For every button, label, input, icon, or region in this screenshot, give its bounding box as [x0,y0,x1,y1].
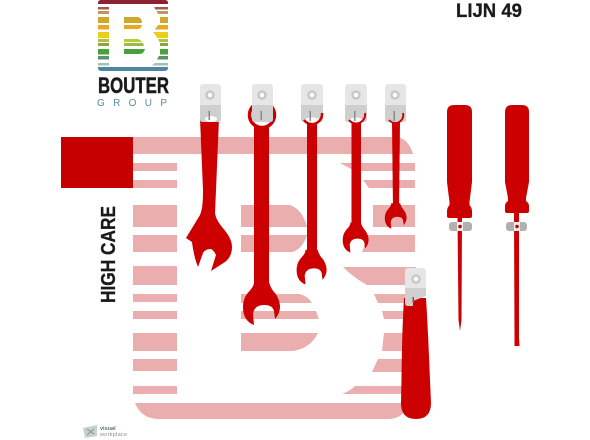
screwdriver 1 [447,105,472,331]
wrench 4 [343,123,369,253]
red label block [61,137,133,188]
logo mark: striped B [98,0,168,71]
logo wordmark: BOUTER [98,73,169,98]
footer logo: visual workplace [83,425,127,438]
logo: Bouter Group [97,0,169,109]
line label: LIJN 49 [456,1,522,22]
screwdriver 2 [505,105,529,346]
logo sub-wordmark: GROUP [97,98,167,109]
panel: striped B background [133,137,416,419]
clip [449,222,472,231]
bracket 6 [405,268,426,306]
clip [506,222,527,231]
wrench 3 [297,124,327,285]
bracket 2 [252,84,273,122]
zone label: HIGH CARE [98,206,120,303]
footer logo: visual workplace: workplace [99,432,127,438]
large screwdriver handle [401,298,431,419]
bracket 3 [301,84,323,124]
wrench 5 [385,122,407,229]
footer icon [83,425,97,438]
bracket 1 [200,84,221,122]
wrench 2 [243,102,280,325]
bracket 4 [345,84,367,124]
bracket 5 [385,84,406,123]
footer text: visual [100,426,116,432]
wrench 1 [186,118,232,271]
